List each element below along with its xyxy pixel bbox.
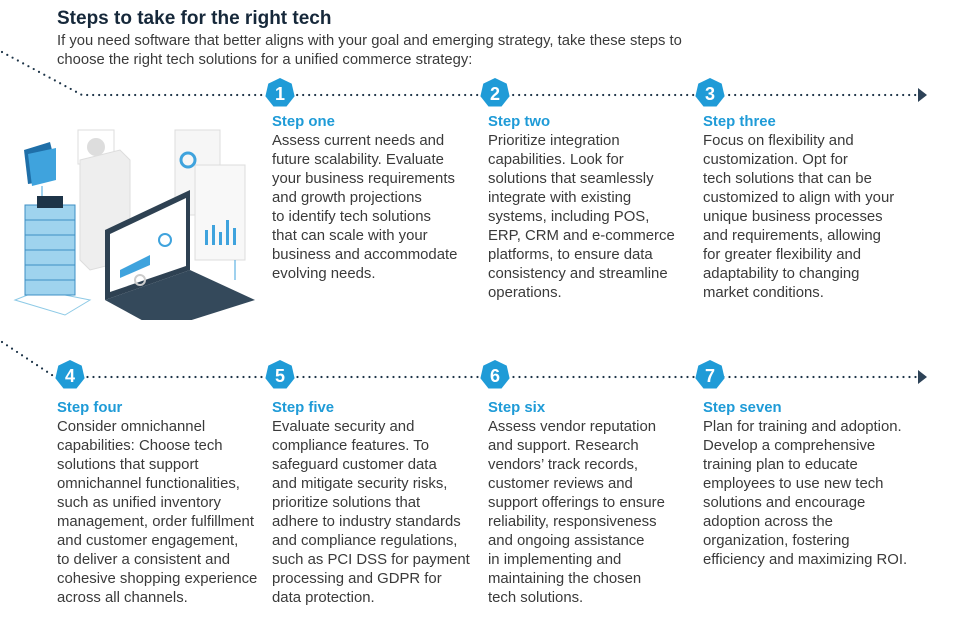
step 6: support offerings to ensure xyxy=(488,495,665,511)
step 6: reliability, responsiveness xyxy=(488,514,657,530)
step 5: prioritize solutions that xyxy=(272,495,420,511)
step 6: Assess vendor reputation xyxy=(488,419,656,435)
step 5 xyxy=(272,400,470,606)
step 4: management, order fulfillment xyxy=(57,514,254,530)
step 6: Step six xyxy=(488,400,545,416)
subtitle: If you need software that better aligns with your goal and emerging strategy, take these steps to xyxy=(57,33,682,49)
badges xyxy=(55,78,725,388)
connector lines and badges: 5 xyxy=(275,366,285,386)
pie chart bubble xyxy=(78,130,114,164)
step 7: adoption across the xyxy=(703,514,833,530)
step 6: maintaining the chosen xyxy=(488,571,641,587)
connector lines and badges: 4 xyxy=(65,366,75,386)
step 6: and support. Research xyxy=(488,438,639,454)
step 5: data protection. xyxy=(272,590,375,606)
step 1: that can scale with your xyxy=(272,228,428,244)
step 3: Step three xyxy=(703,114,776,130)
step 3: and requirements, allowing xyxy=(703,228,881,244)
step 4 xyxy=(57,400,257,606)
step 1: and growth projections xyxy=(272,190,422,206)
subtitle xyxy=(57,33,682,68)
step 1: future scalability. Evaluate xyxy=(272,152,444,168)
step 3 xyxy=(703,114,894,301)
step 1: your business requirements xyxy=(272,171,455,187)
step 7: solutions and encourage xyxy=(703,495,865,511)
step 5: adhere to industry standards xyxy=(272,514,461,530)
arrow heads xyxy=(918,88,927,384)
connector lines and badges: 1 xyxy=(275,84,285,104)
step 3: customization. Opt for xyxy=(703,152,848,168)
illustration: server and laptop xyxy=(14,130,255,320)
step 5: safeguard customer data xyxy=(272,457,437,473)
folder xyxy=(24,142,56,208)
step 4: Consider omnichannel xyxy=(57,419,205,435)
step 1: to identify tech solutions xyxy=(272,209,431,225)
step 1: business and accommodate xyxy=(272,247,457,263)
laptop xyxy=(105,190,255,330)
step 6: and ongoing assistance xyxy=(488,533,644,549)
step 3: for greater flexibility and xyxy=(703,247,861,263)
step 2: platforms, to ensure data xyxy=(488,247,653,263)
back server xyxy=(80,150,130,270)
step 7 xyxy=(703,400,907,568)
step 1 xyxy=(272,114,457,282)
step 7: organization, fostering xyxy=(703,533,850,549)
step 5: Evaluate security and xyxy=(272,419,414,435)
step 3: unique business processes xyxy=(703,209,883,225)
step 7: Step seven xyxy=(703,400,782,416)
step 1: Assess current needs and xyxy=(272,133,444,149)
step 4: across all channels. xyxy=(57,590,188,606)
connector lines and badges: 7 xyxy=(705,366,715,386)
step 2: systems, including POS, xyxy=(488,209,649,225)
subtitle: choose the right tech solutions for a unified commerce strategy: xyxy=(57,52,472,68)
step 3: adaptability to changing xyxy=(703,266,859,282)
step 3: Focus on flexibility and xyxy=(703,133,854,149)
step 2: Prioritize integration xyxy=(488,133,620,149)
step 5: and mitigate security risks, xyxy=(272,476,447,492)
connector lines and badges: 2 xyxy=(490,84,500,104)
step 4: cohesive shopping experience xyxy=(57,571,257,587)
step 1: Step one xyxy=(272,114,335,130)
step 4: capabilities: Choose tech xyxy=(57,438,223,454)
step 4: omnichannel functionalities, xyxy=(57,476,240,492)
title: Steps to take for the right tech xyxy=(57,8,331,29)
step 6: vendors’ track records, xyxy=(488,457,638,473)
step 1: evolving needs. xyxy=(272,266,375,282)
connector lines and badges: 3 xyxy=(705,84,715,104)
step 4: Step four xyxy=(57,400,122,416)
step 5: compliance features. To xyxy=(272,438,429,454)
step 7: training plan to educate xyxy=(703,457,858,473)
step 5: and compliance regulations, xyxy=(272,533,457,549)
step 3: customized to align with your xyxy=(703,190,894,206)
step 2 xyxy=(488,114,675,301)
step 3: market conditions. xyxy=(703,285,824,301)
step 3: tech solutions that can be xyxy=(703,171,872,187)
step 6: customer reviews and xyxy=(488,476,633,492)
step 2: capabilities. Look for xyxy=(488,152,624,168)
connector lines and badges: 6 xyxy=(490,366,500,386)
step 2: Step two xyxy=(488,114,550,130)
step 7: Plan for training and adoption. xyxy=(703,419,902,435)
step 2: consistency and streamline xyxy=(488,266,668,282)
step 2: operations. xyxy=(488,285,562,301)
step 5: Step five xyxy=(272,400,334,416)
step 6: in implementing and xyxy=(488,552,621,568)
step 2: integrate with existing xyxy=(488,190,631,206)
step 7: efficiency and maximizing ROI. xyxy=(703,552,907,568)
step 2: solutions that seamlessly xyxy=(488,171,654,187)
server rack xyxy=(15,196,90,315)
step 4: to deliver a consistent and xyxy=(57,552,230,568)
documents xyxy=(175,130,245,280)
step 4: such as unified inventory xyxy=(57,495,221,511)
step 2: ERP, CRM and e-commerce xyxy=(488,228,675,244)
step 7: Develop a comprehensive xyxy=(703,438,875,454)
step 4: solutions that support xyxy=(57,457,199,473)
step 7: employees to use new tech xyxy=(703,476,883,492)
step 6: tech solutions. xyxy=(488,590,583,606)
step 4: and customer engagement, xyxy=(57,533,238,549)
step 6 xyxy=(488,400,665,606)
step 5: such as PCI DSS for payment xyxy=(272,552,470,568)
step 5: processing and GDPR for xyxy=(272,571,442,587)
